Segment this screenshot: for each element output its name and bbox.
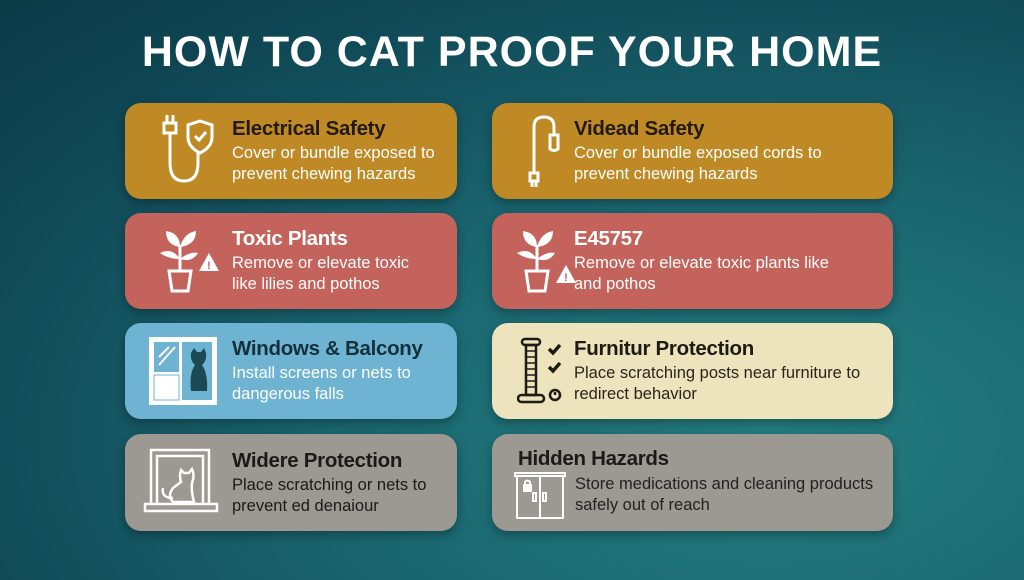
panel: furnitur protection xyxy=(492,323,893,419)
panel: windows & balcony: Windows & Balcony xyxy=(232,337,423,360)
icon: window sill with cat xyxy=(144,448,218,512)
panel: furnitur protection: Furnitur Protection xyxy=(574,337,754,360)
icon: lamp cord xyxy=(528,116,560,187)
panel: furnitur protection: redirect behavior xyxy=(574,385,697,403)
icon: plug and shield xyxy=(162,115,214,182)
panel: videad safety xyxy=(492,103,893,199)
panel: hidden hazards: Hidden Hazards xyxy=(518,447,669,470)
panel: windows & balcony xyxy=(125,323,457,419)
icon: locked cabinet xyxy=(514,472,566,519)
panel: videad safety: Cover or bundle exposed cords to xyxy=(574,144,822,162)
icon: window with cat xyxy=(149,337,217,405)
panel: electrical safety: Cover or bundle exposed to xyxy=(232,144,435,162)
icon: plant with warning xyxy=(517,231,576,292)
panel: hidden hazards: Store medications and cleaning products xyxy=(575,475,873,493)
panel: toxic plants: like lilies and pothos xyxy=(232,275,380,293)
panel: videad safety: prevent chewing hazards xyxy=(574,165,757,183)
panel: windows & balcony: Install screens or nets to xyxy=(232,364,411,382)
panel: windows & balcony: dangerous falls xyxy=(232,385,344,403)
panel: widere protection xyxy=(125,434,457,531)
panel: E45757 xyxy=(492,213,893,309)
panel: E45757: Remove or elevate toxic plants like xyxy=(574,254,829,272)
panel: hidden hazards xyxy=(492,434,893,531)
icon: plant with warning xyxy=(160,231,219,292)
panel: widere protection: prevent ed denaiour xyxy=(232,497,379,515)
panel: electrical safety: prevent chewing hazards xyxy=(232,165,415,183)
panel: toxic plants: Toxic Plants xyxy=(232,227,348,250)
panel: videad safety: Videad Safety xyxy=(574,117,704,140)
panel: widere protection: Place scratching or nets to xyxy=(232,476,426,494)
panel: furnitur protection: Place scratching posts near furniture to xyxy=(574,364,860,382)
icon: scratching post with checks xyxy=(517,338,562,404)
panel: electrical safety: Electrical Safety xyxy=(232,117,385,140)
panel: widere protection: Widere Protection xyxy=(232,449,402,472)
icon: plant with warning: ! xyxy=(564,272,568,284)
title: HOW TO CAT PROOF YOUR HOME xyxy=(142,28,882,76)
panel: E45757: and pothos xyxy=(574,275,656,293)
icon: plant with warning: ! xyxy=(207,260,211,272)
panel: toxic plants xyxy=(125,213,457,309)
panel: hidden hazards: safely out of reach xyxy=(575,496,710,514)
panel: toxic plants: Remove or elevate toxic xyxy=(232,254,409,272)
panel: electrical safety xyxy=(125,103,457,199)
panel: E45757: E45757 xyxy=(574,227,643,250)
